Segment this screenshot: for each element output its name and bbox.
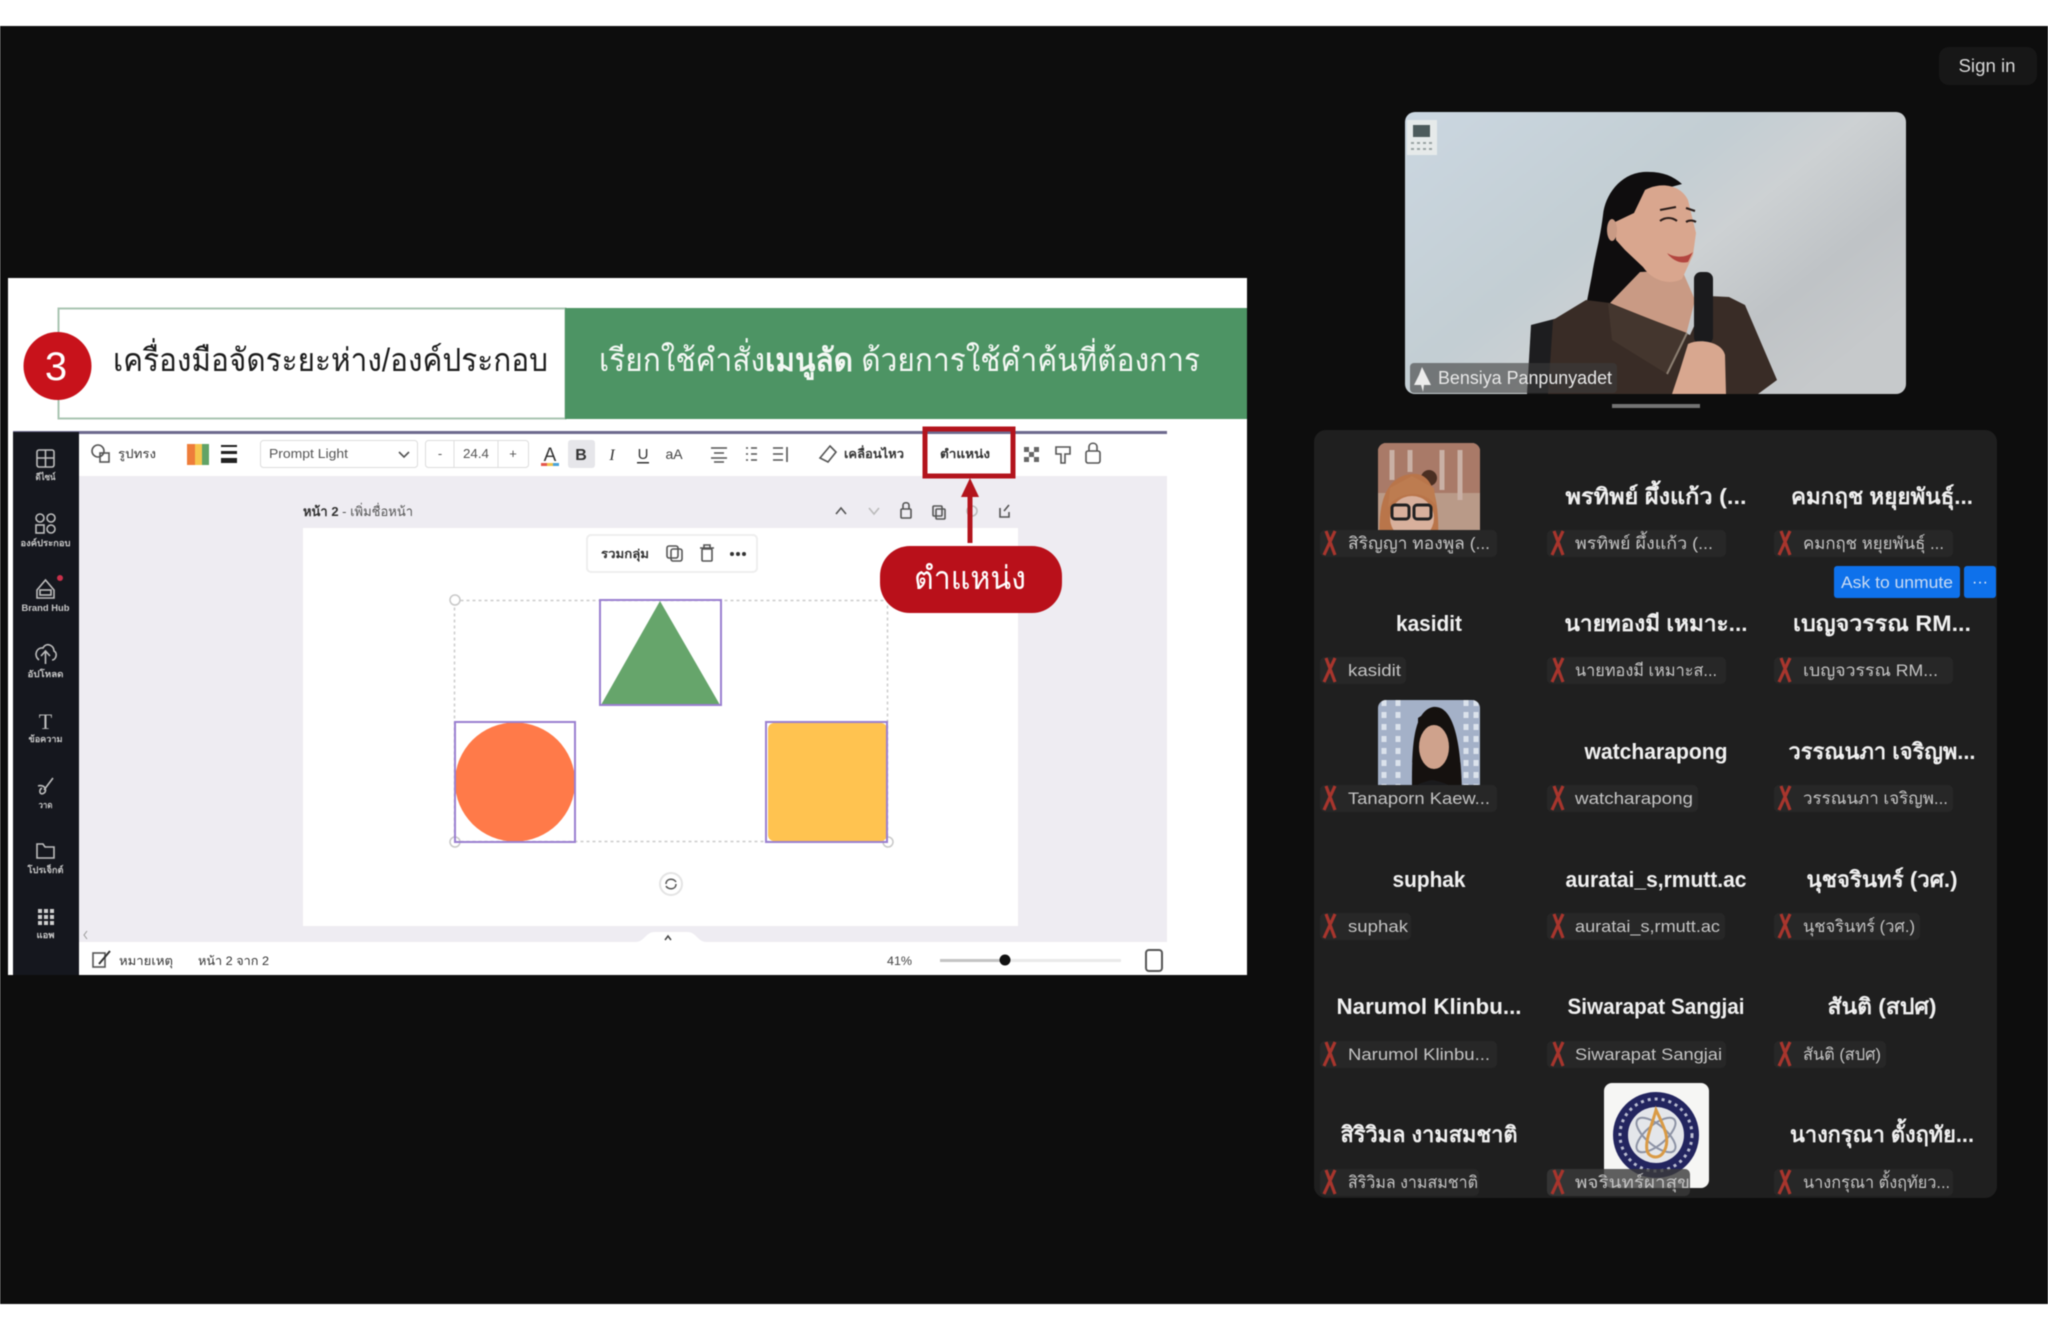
sidebar item: design xyxy=(35,450,56,482)
tile: สันติ xyxy=(1774,994,1936,1068)
arrow: pointing to position tool xyxy=(961,478,979,543)
tile: สิริวิมล xyxy=(1320,1122,1518,1196)
editor toolbar xyxy=(92,440,1100,468)
sidebar item: elements xyxy=(20,514,71,548)
font dropdown xyxy=(260,440,418,468)
tile: Narumol xyxy=(1320,994,1522,1068)
tile: คมกฤช: คมกฤช หยุยพันธุ์ ... xyxy=(1803,534,1944,554)
tile: kasidit: kasidit xyxy=(1396,611,1463,636)
text formatting buttons: aA xyxy=(665,446,683,462)
tool: animate: เคลื่อนไหว xyxy=(844,445,904,461)
tile: พจรินทร์ with logo: พจรินทร์ผาสุข xyxy=(1575,1173,1690,1193)
page canvas xyxy=(303,528,1018,926)
tool: position: ตำแหน่ง xyxy=(940,447,990,461)
button: ask to unmute xyxy=(1834,566,1996,598)
text formatting buttons xyxy=(541,440,683,468)
tile: watcharapong: watcharapong xyxy=(1584,739,1728,764)
shape: green triangle xyxy=(600,600,721,705)
sidebar item: projects xyxy=(26,844,64,875)
text formatting buttons: B xyxy=(575,447,587,464)
sidebar item: upload xyxy=(28,645,64,679)
tool: transparency, style, lock xyxy=(1024,443,1100,463)
tile: เบญจวรรณ xyxy=(1774,611,1971,684)
tile: Narumol: Narumol Klinbu... xyxy=(1348,1045,1490,1064)
tile: วรรณนภา: วรรณนภา เจริญพ... xyxy=(1788,739,1976,765)
text formatting buttons: U xyxy=(638,446,648,463)
tool: colour swatch xyxy=(187,444,209,465)
tile: นุชจรินทร์: นุชจรินทร์ (วศ.) xyxy=(1806,867,1958,894)
font dropdown: Prompt Light xyxy=(269,446,348,461)
font size stepper: - xyxy=(438,446,442,461)
tile: นางกรุณา xyxy=(1774,1118,1974,1196)
font size stepper: + xyxy=(509,446,517,461)
page label: หน้า 2 - เพิ่มชื่อหน้า xyxy=(303,503,413,519)
tile: สิริวิมล: สิริวิมล งามสมชาติ xyxy=(1348,1173,1478,1192)
tile: นุชจรินทร์ xyxy=(1774,867,1958,940)
button: sign in: Sign in xyxy=(1958,56,2016,76)
tile: นางกรุณา: นางกรุณา ตั้งฤทัย... xyxy=(1790,1118,1974,1149)
tile: สิริวิมล: สิริวิมล งามสมชาติ xyxy=(1340,1122,1518,1147)
sidebar item: upload: อัปโหลด xyxy=(28,668,64,679)
tile: พรทิพย์: พรทิพย์ ผึ้งแก้ว (... xyxy=(1575,531,1713,553)
video wall background xyxy=(1405,112,1906,394)
avatar: woman with glasses xyxy=(1377,442,1481,531)
resize handle xyxy=(1612,404,1700,408)
callout: position pill xyxy=(880,546,1062,613)
step number badge xyxy=(24,332,92,400)
chair xyxy=(1527,318,1558,394)
presenter xyxy=(1548,172,1777,394)
tile: วรรณนภา: วรรณนภา เจริญพ... xyxy=(1803,789,1948,808)
button: sign in xyxy=(1939,47,2037,85)
collapse tab and bottom status bar: 41% xyxy=(887,954,912,968)
tile: watcharapong: watcharapong xyxy=(1574,789,1693,808)
tile: พรทิพย์ xyxy=(1547,480,1746,557)
tile: พจรินทร์ with logo xyxy=(1547,1083,1709,1196)
tile: สิริญญา xyxy=(1320,443,1497,557)
selection group frame xyxy=(450,595,893,847)
alignment and list buttons xyxy=(711,447,787,462)
tile: เบญจวรรณ: เบญจวรรณ RM... xyxy=(1793,611,1971,637)
floating context toolbar xyxy=(587,535,757,572)
avatar: circular institution logo xyxy=(1604,1083,1709,1188)
panel: shared slide xyxy=(8,278,1247,975)
tile: kasidit: kasidit xyxy=(1348,661,1401,680)
tile: suphak: suphak xyxy=(1392,867,1466,892)
slide header: white title box: เครื่องมือจัดระยะห่าง/องค์ประกอบ xyxy=(113,338,548,378)
page action icons xyxy=(836,503,1009,519)
shape: yellow square xyxy=(766,722,887,842)
sidebar item: projects: โปรเจ็กต์ xyxy=(26,863,64,875)
font size stepper: 24.4 xyxy=(463,447,489,461)
tile: นายทองมี xyxy=(1547,611,1748,684)
tile: คมกฤช: คมกฤช หยุยพันธุ์... xyxy=(1791,484,1973,511)
tile: นายทองมี: นายทองมี เหมาะ... xyxy=(1564,611,1748,636)
tile: auratai: auratai_s,rmutt.ac xyxy=(1575,917,1721,936)
rotate handle xyxy=(660,873,682,895)
floating context toolbar: รวมกลุ่ม xyxy=(601,547,649,562)
tile: นางกรุณา: นางกรุณา ตั้งฤทัยว... xyxy=(1803,1170,1950,1193)
name tag: Bensiya Panpunyadet xyxy=(1438,368,1612,388)
tool: animate xyxy=(820,445,904,462)
tile: kasidit xyxy=(1320,611,1463,684)
collapse tab and bottom status bar: หน้า 2 จาก 2 xyxy=(198,954,269,968)
button: ask to unmute: Ask to unmute xyxy=(1841,573,1953,592)
sidebar item: draw xyxy=(38,778,53,810)
tile: วรรณนภา xyxy=(1774,739,1976,812)
editor sidebar xyxy=(13,432,79,975)
shape: orange circle xyxy=(455,722,575,842)
sidebar item: apps: แอพ xyxy=(36,930,55,940)
step number badge: 3 xyxy=(45,345,67,389)
tile: Siwarapat: Siwarapat Sangjai xyxy=(1568,994,1744,1019)
tile: เบญจวรรณ: เบญจวรรณ RM... xyxy=(1803,661,1938,680)
tile: suphak: suphak xyxy=(1348,917,1409,936)
sidebar item: draw: วาด xyxy=(38,800,53,810)
font size stepper xyxy=(426,440,528,468)
avatar: woman with long black hair xyxy=(1377,699,1481,786)
tile: นายทองมี: นายทองมี เหมาะส... xyxy=(1575,661,1717,680)
tool: border lines xyxy=(221,445,237,463)
sidebar item: brand hub: Brand Hub xyxy=(22,603,70,613)
tile: สันติ: สันติ (สปศ) xyxy=(1828,994,1936,1019)
button: ask to unmute: ··· xyxy=(1972,574,1988,591)
tool: shape xyxy=(92,445,156,462)
wall thermostat xyxy=(1407,120,1437,155)
slide header: green instruction banner xyxy=(565,308,1247,419)
collapse tab and bottom status bar xyxy=(84,931,1162,971)
tile: Siwarapat xyxy=(1547,994,1744,1068)
slide header: white title box xyxy=(58,308,566,418)
sidebar item: elements: องค์ประกอบ xyxy=(20,537,71,548)
tile: Tanaporn: Tanaporn Kaew... xyxy=(1348,789,1490,808)
tile: Tanaporn xyxy=(1320,700,1497,812)
panel: presenter video xyxy=(1405,112,1906,394)
text formatting buttons: I xyxy=(608,447,615,464)
sidebar item: text xyxy=(28,709,63,744)
sidebar item: text: T xyxy=(39,709,53,734)
panel: participant gallery xyxy=(1314,430,1997,1198)
name tag xyxy=(1410,363,1617,393)
sidebar item: design: ดีไซน์ xyxy=(35,471,56,482)
tile: watcharapong xyxy=(1547,739,1728,812)
tile: auratai: auratai_s,rmutt.ac xyxy=(1566,867,1746,892)
text formatting buttons: A xyxy=(544,445,557,466)
tile: Narumol: Narumol Klinbu... xyxy=(1336,994,1522,1019)
tile: suphak xyxy=(1320,867,1466,940)
tile: สันติ: สันติ (สปศ) xyxy=(1803,1045,1881,1064)
tile: auratai xyxy=(1547,867,1746,940)
tool: shape: รูปทรง xyxy=(118,447,156,462)
editor screenshot xyxy=(13,431,1167,975)
slide header: green instruction banner: เรียกใช้คำสั่งเมนูลัด ด้วยการใช้คำค้นที่ต้องการ xyxy=(599,338,1200,381)
callout: red highlight box xyxy=(925,429,1013,476)
tile: พรทิพย์: พรทิพย์ ผึ้งแก้ว (... xyxy=(1566,480,1746,509)
tile: นุชจรินทร์: นุชจรินทร์ (วศ.) xyxy=(1803,917,1915,937)
tile: สิริญญา: สิริญญา ทองพูล (... xyxy=(1348,534,1490,554)
tile: Siwarapat: Siwarapat Sangjai xyxy=(1575,1045,1722,1064)
tile: คมกฤช xyxy=(1774,484,1973,557)
sidebar item: brand hub xyxy=(22,575,70,613)
sidebar item: text: ข้อความ xyxy=(28,734,63,744)
sidebar item: apps xyxy=(36,909,55,940)
callout: position pill: ตำแหน่ง xyxy=(914,560,1026,596)
collapse tab and bottom status bar: หมายเหตุ xyxy=(119,954,173,969)
